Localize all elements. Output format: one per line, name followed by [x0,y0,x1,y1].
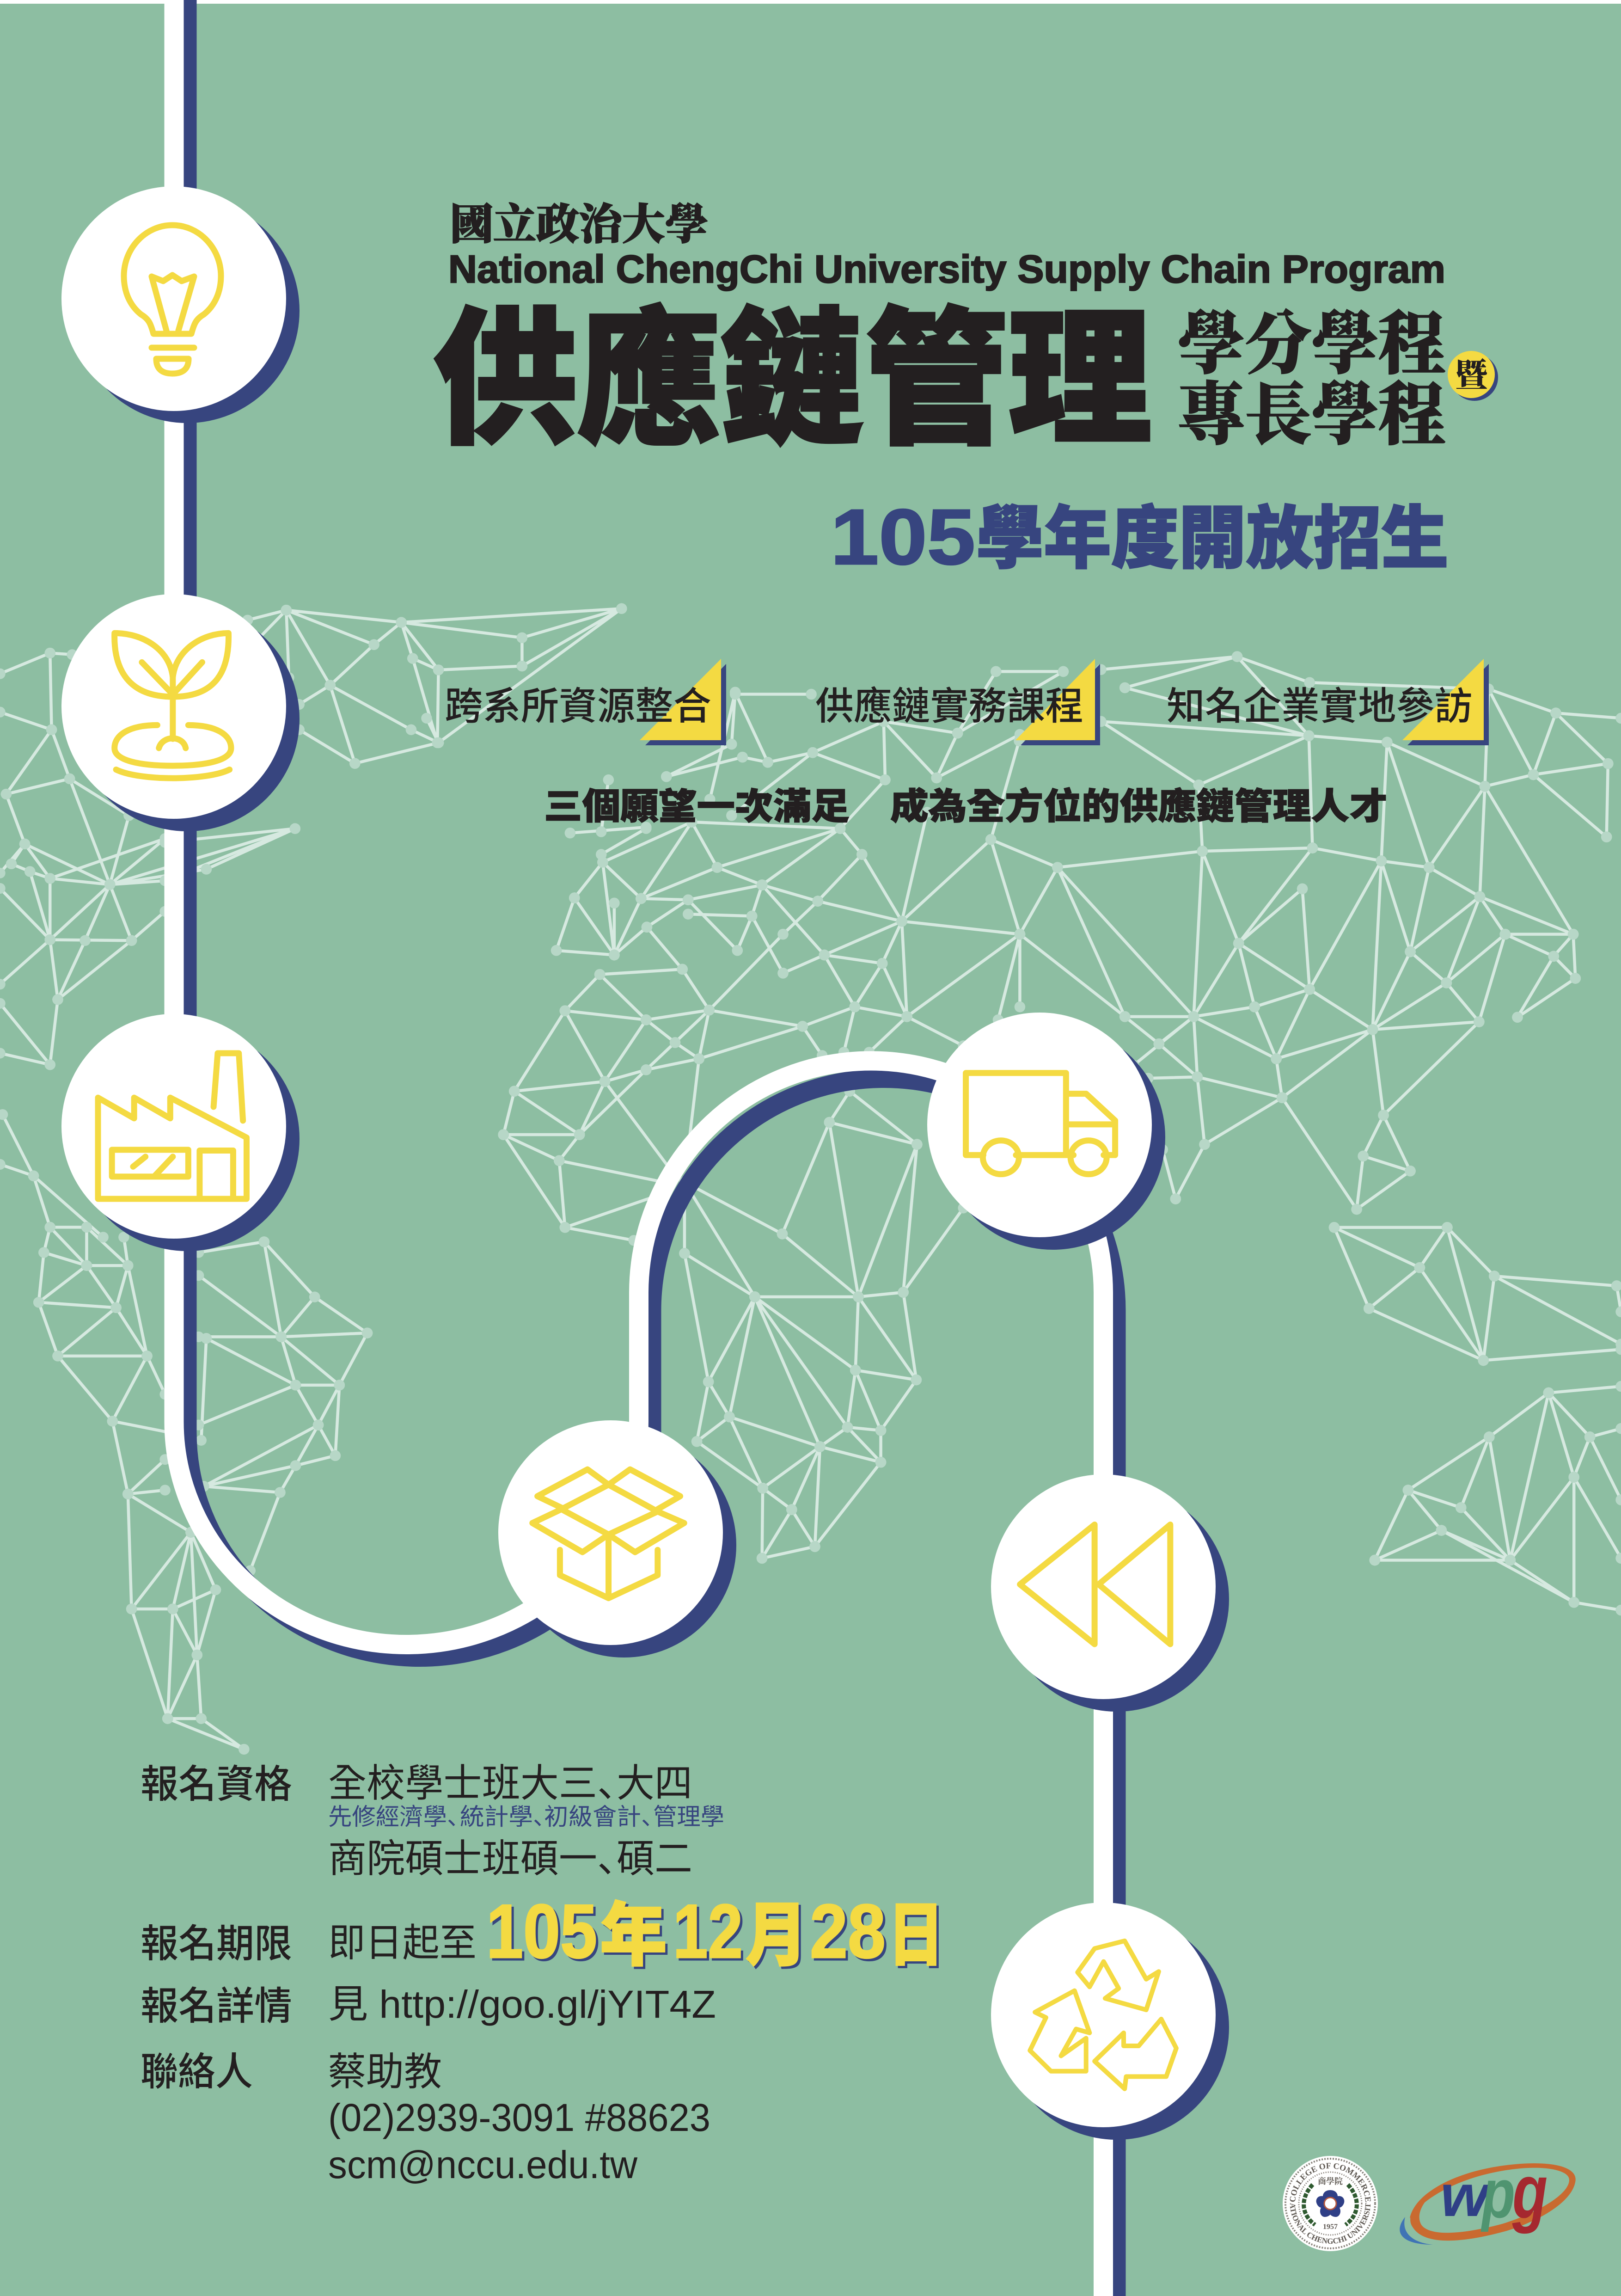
station: recycle [991,1903,1229,2140]
icon: recycle arrows [1030,1941,1176,2089]
station: truck [927,1013,1165,1250]
info: deadline: 即日起至 [328,1921,477,1964]
info: eligibility: 大四 [617,1762,692,1805]
logo: college of commerce seal: 商學院 [1318,2177,1343,2186]
subtitle: credit program: 學分學程 [1176,307,1445,383]
badge: and [1448,351,1498,401]
enrolment heading: 學年度開放招生 [976,501,1449,577]
icon: rewind arrows [1020,1524,1170,1644]
info: contact: scm@nccu.edu.tw [328,2143,637,2186]
station: light bulb [61,186,300,423]
info: contact: (02)2939-3091 #88623 [328,2096,710,2139]
station: box [498,1420,736,1658]
info: details link: 見 http://goo.gl/jYIT4Z [328,1983,716,2026]
info: deadline: 105 [489,1891,599,1976]
icon: truck [966,1073,1115,1174]
icon: factory [98,1053,246,1199]
icon: sprout [115,633,231,778]
info: deadline: 報名期限 [141,1922,292,1965]
info: deadline: 月 [748,1899,809,1977]
enrolment heading [831,493,1449,581]
info: eligibility: 先修經濟學 [328,1804,447,1830]
info: eligibility: 商院碩士班碩一 [328,1837,597,1880]
info: deadline: 年 [600,1897,667,1974]
info: deadline: 日 [888,1897,943,1974]
info: contact [141,2050,710,2186]
slogan: 成為全方位的供應鏈管理人才 [890,786,1388,827]
logo: college of commerce seal: 1957 [1323,2223,1338,2231]
info: eligibility: 初級會計 [544,1804,641,1830]
feature tag: company visits [1167,659,1489,745]
subtitle: specialty program: 專長學程 [1178,378,1445,454]
main title: 供應鏈管理 [434,298,1152,462]
logo: college of commerce seal: COLLEGE OF COMMERCE [1288,2161,1373,2203]
info: eligibility: 管理學 [653,1804,724,1830]
feature tag: cross-department resources [445,659,726,745]
icon: light bulb [124,225,221,374]
info: deadline: 28 [810,1889,886,1974]
info: deadline: 12 [675,1891,745,1976]
info: eligibility: 報名資格 [141,1762,292,1806]
world map network: Americas and Arctic [0,608,622,1749]
slogan [544,786,1388,827]
icon: open box [532,1469,684,1598]
feature tag: company visits: 知名企業實地參訪 [1167,685,1473,728]
info: eligibility: 、 [597,1837,636,1880]
info: eligibility: 、 [641,1804,665,1830]
info: deadline: 日 [891,1899,946,1977]
feature tag: practical courses [815,659,1100,745]
logo: wpg: p [1480,2155,1515,2232]
slogan: 三個願望一次滿足 [544,786,850,827]
university name in Chinese: 國立政治大學 [450,201,708,248]
info: eligibility [141,1762,724,1880]
station: sprout [61,594,300,831]
supply chain pipeline [174,0,1116,2296]
info: contact: 聯絡人 [141,2050,253,2093]
world map network: Eurasia, Africa, Australia [503,657,1621,1610]
logo: college of commerce seal: NATIONAL CHENGCHI UNIVERSITY [0,0,1372,2246]
info: eligibility: 、 [533,1804,557,1830]
info: deadline: 28 [812,1891,888,1976]
info: eligibility: 碩二 [617,1837,692,1880]
info: deadline: 年 [602,1899,669,1977]
info: contact: 蔡助教 [328,2050,442,2093]
feature tag: cross-department resources: 跨系所資源整合 [445,685,711,728]
logo: wpg: g [1512,2149,1548,2234]
info: deadline: 105 [486,1889,597,1974]
program name in English: National ChengChi University Supply Chain Program [448,247,1445,291]
badge: and: 暨 [1455,358,1488,395]
enrolment heading: 105 [831,493,975,581]
logo: wpg [1400,2149,1576,2245]
info: details link [141,1983,716,2028]
info: eligibility: 統計學 [460,1804,533,1830]
info: deadline: 12 [673,1889,743,1974]
station: rewind [991,1474,1229,1712]
info: eligibility: 全校學士班大三 [328,1762,597,1805]
info: eligibility: 、 [447,1804,471,1830]
info: eligibility: 、 [597,1762,636,1805]
station: factory [61,1014,300,1251]
info: deadline: 月 [746,1897,807,1974]
info: deadline [141,1889,946,1977]
feature tag: practical courses: 供應鏈實務課程 [815,685,1083,728]
logo: wpg: w [1440,2163,1492,2229]
info: details link: 報名詳情 [141,1984,292,2028]
